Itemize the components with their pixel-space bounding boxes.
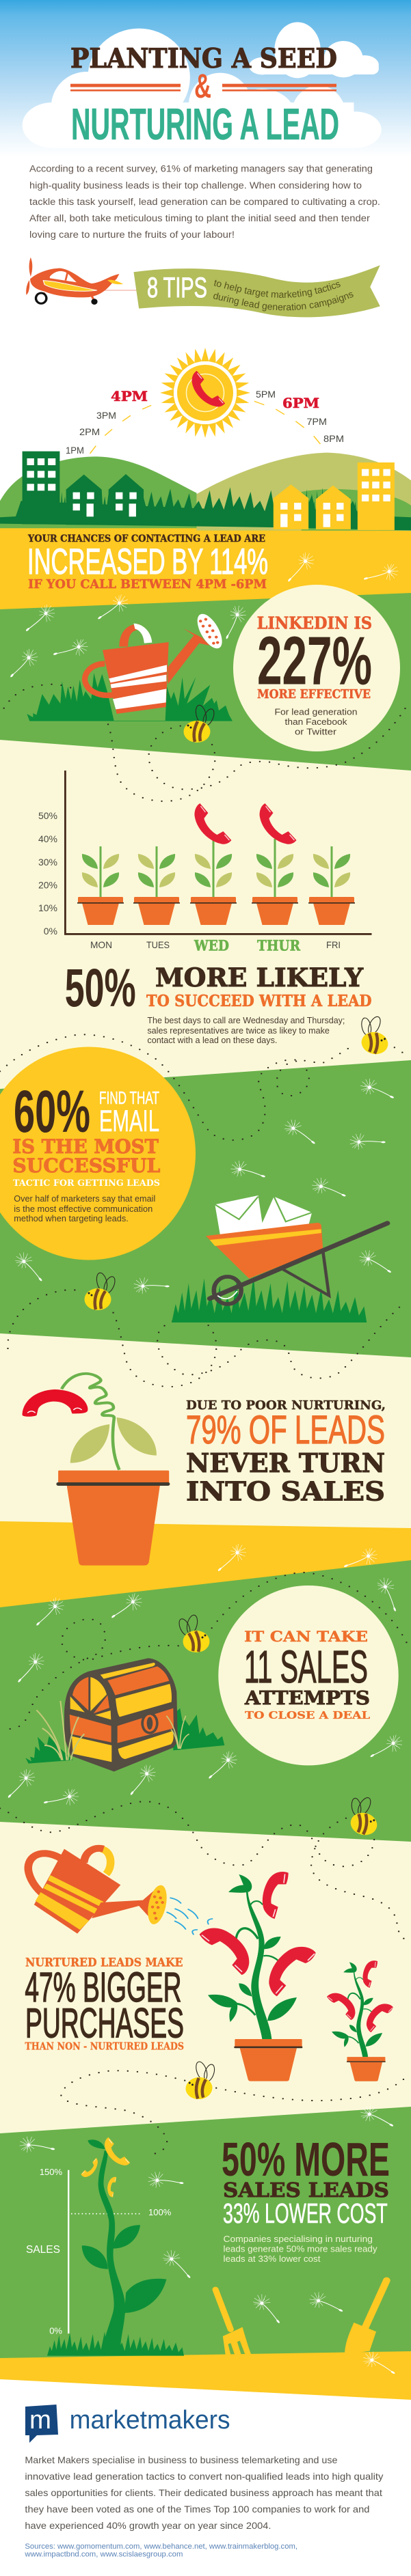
stat: 50% more sales leads: Companies specialising in nurturing (223, 2234, 373, 2244)
stat: 79% of leads: DUE TO POOR NURTURING, (186, 1399, 386, 1413)
logo: market makers: marketmakers (70, 2406, 230, 2435)
bar chart: plants by day: 30% (38, 857, 57, 868)
chart: sales growth beanstalk (26, 2137, 184, 2356)
icon: bee (354, 1012, 393, 1057)
chart: sales growth beanstalk: SALES (26, 2244, 60, 2256)
callout: linkedin 227% (233, 585, 400, 751)
icon: bee (183, 704, 216, 743)
callout: linkedin 227%: than Facebook (284, 717, 347, 727)
icon: small phone plant (327, 1961, 393, 2081)
bar chart: plants by day: WED (194, 937, 229, 954)
headline: 114%: IF YOU CALL BETWEEN 4PM -6PM (28, 578, 267, 592)
callout: 60% email: is the most effective communication (14, 1204, 153, 1214)
callout: 11 sales attempts (218, 1585, 399, 1765)
bar chart: plants by day: FRI (326, 939, 341, 950)
callout: 60% email: TACTIC FOR GETTING LEADS (13, 1178, 160, 1189)
intro text: high-quality business leads is their top challenge. When considering how to (29, 180, 362, 191)
bee flight trails (0, 684, 409, 2154)
dandelions (8, 553, 408, 2379)
headline: 114% (27, 534, 268, 592)
stat: 47% bigger purchases: THAN NON - NURTURED LEADS (25, 2041, 184, 2053)
hills and town (0, 452, 411, 531)
sources (24, 2543, 297, 2559)
chart: sales growth beanstalk: 0% (49, 2326, 62, 2336)
callout: 60% email: IS THE MOST (12, 1135, 159, 1158)
sources: Sources: www.gomomentum.com, www.behance.net, www.trainmakerblog.com, (25, 2543, 297, 2551)
stat: 79% of leads (186, 1399, 386, 1507)
title: PLANTING A SEED (70, 43, 337, 74)
logo: market makers (25, 2405, 230, 2443)
intro text: tackle this task yourself, lead generation can be compared to cultivating a crop. (29, 197, 380, 207)
icon: plane (26, 258, 137, 305)
stat: 50% more likely: TO SUCCEED WITH A LEAD (146, 992, 372, 1010)
icon: sun with phone (160, 348, 250, 438)
stat: 50% more likely: sales representatives are twice as likey to make (147, 1025, 330, 1036)
bar chart: plants by day (38, 771, 372, 954)
stat: 50% more sales leads: leads generate 50% more sales ready (223, 2244, 377, 2254)
callout: 60% email: Over half of marketers say that email (14, 1193, 155, 1204)
title (70, 43, 339, 149)
callout: linkedin 227%: MORE EFFECTIVE (257, 687, 371, 702)
callout: 11 sales attempts: IT CAN TAKE (244, 1628, 368, 1645)
callout: linkedin 227%: or Twitter (295, 727, 337, 737)
banner: 8 tips (134, 265, 380, 317)
icon: wilted plant with phone (23, 1374, 170, 1566)
bar chart: plants by day: 40% (38, 833, 57, 844)
chart: sales growth beanstalk: 150% (40, 2167, 62, 2177)
stat: 50% more likely: The best days to call are Wednesday and Thursday; (147, 1015, 345, 1025)
callout: 60% email: SUCCESSFUL (12, 1154, 160, 1177)
callout: 60% email: FIND THAT (99, 1088, 159, 1108)
stat: 50% more likely: 50% (65, 957, 136, 1018)
stat: 79% of leads: INTO SALES (186, 1476, 385, 1507)
intro text: After all, both take meticulous timing to plant the initial seed and then tender (29, 213, 371, 223)
banner: 8 tips: during lead generation campaigns (213, 292, 354, 311)
stat: 79% of leads: NEVER TURN (186, 1448, 385, 1478)
headline: 114%: INCREASED BY 114% (27, 542, 268, 582)
company description: they have been voted as one of the Times Top 100 companies to work for and (25, 2504, 369, 2515)
time labels: 7PM (306, 416, 327, 427)
time labels: 3PM (96, 410, 116, 421)
bar chart: plants by day: MON (90, 939, 112, 950)
company description: sales opportunities for clients. Their dedicated business approach has meant that (25, 2487, 382, 2498)
icon: watering can with water (28, 1848, 212, 1935)
title: & (194, 67, 211, 105)
icon: bee (183, 2059, 220, 2101)
callout: linkedin 227%: LINKEDIN IS (257, 613, 372, 633)
callout: 11 sales attempts: ATTEMPTS (244, 1687, 370, 1709)
time labels: 2PM (79, 426, 100, 437)
bar chart: plants by day: THUR (257, 937, 300, 954)
time labels: 8PM (323, 433, 344, 444)
icon: garden fork and trowel (215, 2280, 386, 2355)
company description: have experienced 40% growth year on year since 2004. (25, 2520, 271, 2531)
callout: 60% email (0, 1047, 196, 1260)
icon: large phone plant (200, 1872, 316, 2081)
bar chart: plants by day: TUES (146, 939, 170, 950)
time labels (66, 388, 344, 456)
company description: innovative lead generation tactics to convert non-qualified leads into high quality (25, 2471, 383, 2482)
stat: 47% bigger purchases: PURCHASES (25, 2000, 184, 2047)
time labels: 4PM (111, 388, 148, 404)
callout: 60% email: method when targeting leads. (14, 1213, 129, 1223)
time labels: 1PM (66, 445, 84, 456)
callout: 60% email: 60% (14, 1079, 90, 1145)
intro text (29, 164, 380, 240)
stat: 50% more likely: contact with a lead on these days. (147, 1035, 277, 1045)
bar chart: plants by day: 10% (38, 902, 57, 913)
icon: bee (177, 1614, 209, 1652)
stat: 50% more likely: MORE LIKELY (155, 962, 364, 993)
callout: 60% email: EMAIL (99, 1105, 159, 1138)
icon: watering can with grass (27, 611, 233, 721)
clouds (23, 22, 382, 148)
company description: Market Makers specialise in business to business telemarketing and use (25, 2454, 338, 2465)
bar chart: plants by day: 0% (44, 926, 57, 937)
stat: 47% bigger purchases: NURTURED LEADS MAKE (25, 1956, 183, 1969)
time labels: 5PM (256, 389, 276, 400)
icon: treasure chest (25, 1658, 224, 1771)
stat: 50% more sales leads: SALES LEADS (223, 2178, 389, 2202)
logo: market makers: m (29, 2406, 51, 2435)
callout: 11 sales attempts: TO CLOSE A DEAL (245, 1709, 371, 1721)
bar chart: plants by day: 20% (38, 880, 57, 891)
icon: wheelbarrow with envelopes (172, 1195, 388, 1322)
icon: bee (343, 1792, 384, 1838)
company description (25, 2454, 383, 2531)
callout: linkedin 227%: For lead generation (275, 707, 357, 717)
intro text: According to a recent survey, 61% of marketing managers say that generating (29, 164, 373, 174)
intro text: loving care to nurture the fruits of your labour! (29, 230, 235, 240)
stat: 47% bigger purchases: 47% BIGGER (25, 1964, 181, 2011)
headline: 114%: YOUR CHANCES OF CONTACTING A LEAD ARE (27, 534, 265, 544)
banner: 8 tips: 8 TIPS (147, 271, 207, 303)
chart: sales growth beanstalk: 100% (148, 2207, 172, 2217)
stat: 47% bigger purchases (25, 1956, 184, 2053)
banner: 8 tips: to help target marketing tactics (214, 280, 341, 298)
icon: bee (85, 1272, 117, 1310)
stat: 50% more sales leads (222, 2133, 390, 2264)
sources: www.impactbnd.com, www.scislaesgroup.com (24, 2551, 183, 2559)
bar chart: plants by day: 50% (38, 810, 57, 821)
stat: 50% more sales leads: leads at 33% lower cost (223, 2254, 321, 2264)
stat: 50% more likely (65, 957, 371, 1045)
time labels: 6PM (282, 395, 319, 411)
